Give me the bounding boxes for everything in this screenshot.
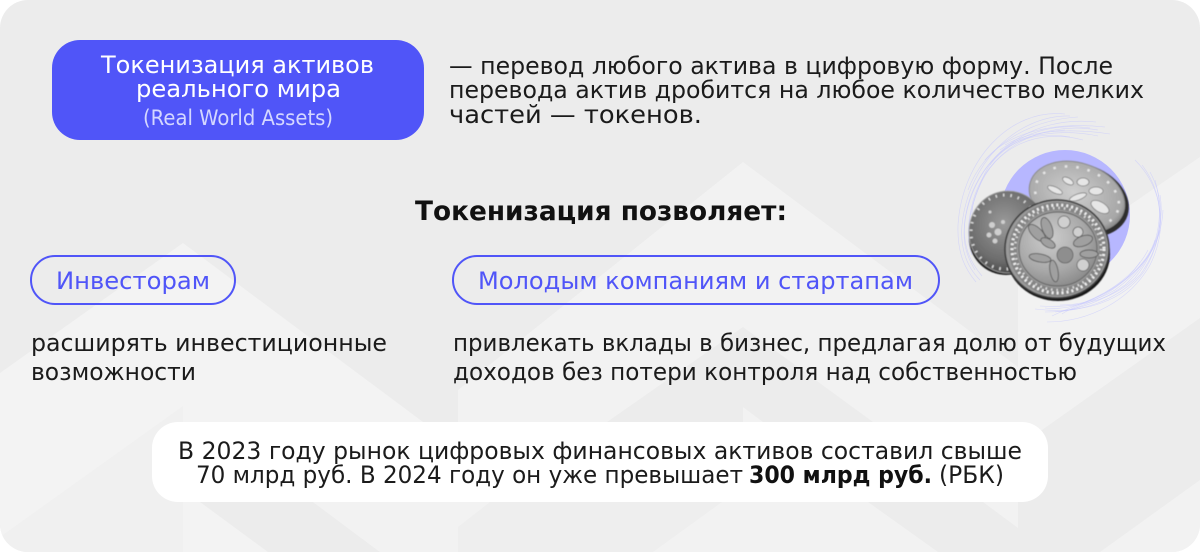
- callout: bold figure: 300 млрд руб.: [749, 461, 932, 489]
- heading: Токенизация позволяет:: [415, 196, 787, 227]
- icon: back right coin: [1020, 150, 1139, 250]
- text: investors benefit: [31, 329, 387, 386]
- pill: investors: [31, 256, 235, 304]
- icon: purple circle: [1000, 150, 1130, 280]
- text: startups benefit: привлекать вклады в бизнес, предлагая долю от будущих: [453, 329, 1166, 357]
- text: startups benefit: доходов без потери контроля над собственностью: [453, 358, 1077, 386]
- pill: young companies and startups: Молодым компаниям и стартапам: [478, 267, 913, 295]
- badge title line 1: Токенизация активов: [100, 51, 374, 79]
- text: startups benefit: [453, 329, 1166, 386]
- badge: Real World Assets: [52, 40, 424, 140]
- icon: silver coins: [958, 114, 1163, 322]
- text: investors benefit: возможности: [31, 358, 196, 386]
- callout: source: (РБК): [939, 461, 1004, 489]
- definition text: перевода актив дробится на любое количество мелких: [449, 76, 1144, 104]
- icon: wisps upper left: [958, 114, 1110, 282]
- callout: market size: 70 млрд руб. В 2024 году он уже превышает: [196, 461, 743, 489]
- callout: market size: [152, 422, 1048, 502]
- pill: investors: Инвесторам: [56, 267, 210, 295]
- icon: front coin: [1005, 200, 1110, 301]
- definition text: — перевод любого актива в цифровую форму. После: [449, 52, 1113, 80]
- icon: wisps lower right: [1035, 160, 1163, 322]
- callout: market size: В 2023 году рынок цифровых финансовых активов составил свыше: [178, 437, 1022, 465]
- definition text: [449, 52, 1144, 129]
- pill: young companies and startups: [453, 256, 939, 304]
- badge subtitle: (Real World Assets): [143, 106, 333, 130]
- definition text: частей — токенов.: [449, 100, 702, 129]
- icon: back left coin: [969, 191, 1047, 275]
- text: investors benefit: расширять инвестиционные: [31, 329, 387, 357]
- badge title line 2: реального мира: [136, 75, 341, 103]
